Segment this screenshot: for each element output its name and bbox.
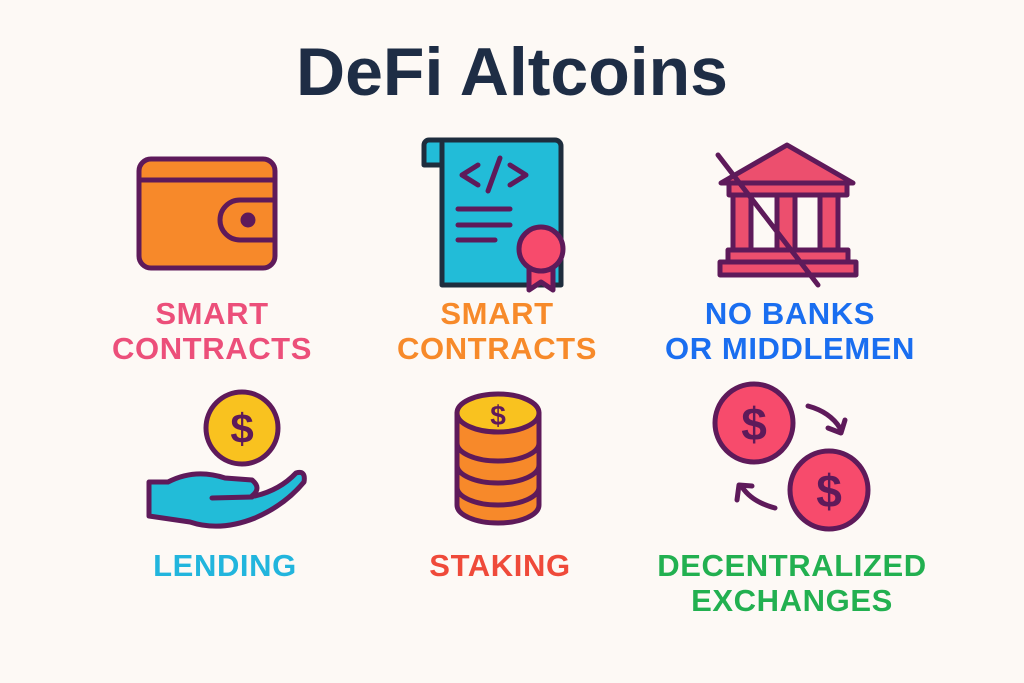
icon: bank crossed out	[718, 145, 856, 285]
icon: exchange coins: $	[741, 398, 767, 450]
label: decentralized exchanges: EXCHANGES	[691, 583, 893, 618]
label: no banks: NO BANKS	[705, 296, 875, 331]
icon: lending hand with coin	[149, 392, 304, 526]
label: decentralized exchanges: DECENTRALIZED	[657, 548, 927, 583]
label: smart contracts 2: CONTRACTS	[397, 331, 597, 366]
label: lending: LENDING	[153, 548, 297, 583]
icon: lending hand with coin: $	[230, 405, 254, 452]
icon: contract document	[424, 140, 563, 290]
icon: coin stack: $	[490, 400, 506, 431]
label: smart contracts 1: SMART	[155, 296, 269, 331]
icon: exchange coins: $	[816, 465, 842, 517]
title: DeFi Altcoins	[296, 34, 728, 110]
icon: wallet	[139, 159, 275, 268]
label: no banks	[665, 296, 915, 366]
icon: exchange coins	[715, 384, 868, 529]
label: staking: STAKING	[429, 548, 571, 583]
label: smart contracts 2: SMART	[440, 296, 554, 331]
label: smart contracts 1	[112, 296, 312, 366]
label: no banks: OR MIDDLEMEN	[665, 331, 915, 366]
label: smart contracts 1: CONTRACTS	[112, 331, 312, 366]
icon: coin stack	[457, 394, 539, 523]
label: decentralized exchanges	[657, 548, 927, 618]
label: smart contracts 2	[397, 296, 597, 366]
